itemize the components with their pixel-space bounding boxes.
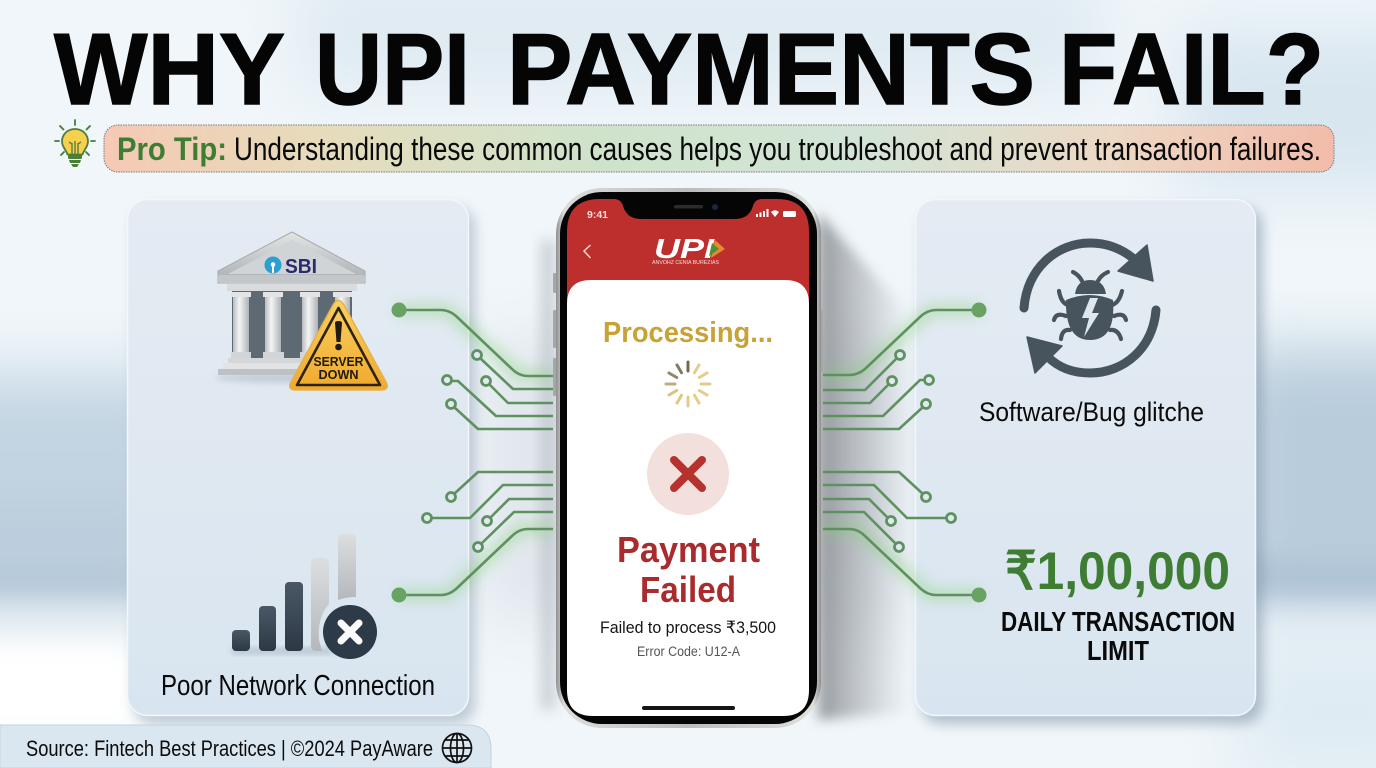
payment failed heading: Failed bbox=[640, 569, 736, 610]
sbi logo bbox=[264, 256, 317, 278]
limit caption bbox=[1001, 606, 1235, 666]
notch speaker and camera bbox=[674, 204, 718, 210]
warning triangle: SERVER bbox=[314, 354, 364, 369]
limit caption: LIMIT bbox=[1087, 635, 1149, 666]
title: UPI bbox=[315, 14, 470, 126]
icon: weak network signal bbox=[232, 534, 377, 659]
upi logo: UPI bbox=[654, 233, 716, 264]
circuit traces: left bbox=[392, 302, 553, 602]
panel: limits and glitches bbox=[916, 200, 1263, 724]
glow behind main traces bbox=[399, 310, 979, 595]
phone body bbox=[556, 188, 821, 728]
phone drop shadow bbox=[540, 212, 912, 720]
title: FAIL? bbox=[1059, 14, 1324, 126]
bank building bbox=[218, 232, 365, 375]
icon: light bulb bbox=[55, 120, 95, 167]
limit amount: ₹1,00,000 bbox=[1005, 542, 1230, 601]
warning triangle bbox=[290, 300, 387, 390]
pro tip banner bbox=[104, 125, 1334, 172]
payment failed heading: Payment bbox=[617, 529, 760, 570]
no signal badge bbox=[323, 605, 377, 659]
limit caption: DAILY TRANSACTION bbox=[1001, 606, 1235, 637]
home indicator bbox=[642, 706, 735, 710]
warning triangle: DOWN bbox=[318, 367, 358, 382]
footer source bar bbox=[0, 725, 491, 768]
back arrow bbox=[584, 245, 590, 258]
spinner bbox=[666, 362, 710, 406]
error code: Error Code: U12-A bbox=[637, 644, 740, 659]
status bar: 9:41 bbox=[587, 209, 608, 221]
source text: Source: Fintech Best Practices | ©2024 PayAware bbox=[26, 736, 433, 761]
icon: bug with refresh arrows bbox=[1024, 243, 1156, 373]
icon: bank with server down warning bbox=[215, 232, 387, 390]
failure badge bbox=[647, 433, 729, 515]
failed amount: Failed to process ₹3,500 bbox=[600, 618, 776, 637]
title bbox=[54, 14, 1324, 126]
bug bbox=[1054, 272, 1126, 340]
status bar bbox=[587, 209, 796, 221]
sbi logo: SBI bbox=[285, 256, 317, 278]
label: poor network: Poor Network Connection bbox=[161, 670, 435, 702]
circuit traces: right bbox=[823, 302, 986, 602]
phone side buttons bbox=[553, 273, 823, 396]
title: WHY bbox=[54, 14, 285, 126]
pro tip label: Pro Tip: bbox=[117, 131, 227, 167]
upi logo bbox=[652, 233, 725, 266]
processing label: Processing... bbox=[603, 317, 773, 349]
upi logo: ANVOHZ CENIA BUREZIAS bbox=[652, 260, 719, 266]
payment failed heading bbox=[617, 529, 760, 610]
panel: server down bbox=[128, 200, 475, 724]
phone bbox=[553, 188, 823, 728]
title: PAYMENTS bbox=[507, 14, 1035, 126]
icon: globe bbox=[442, 734, 472, 762]
label: software bug: Software/Bug glitche bbox=[979, 397, 1204, 427]
refresh arrows bbox=[1024, 243, 1156, 373]
phone screen bbox=[567, 199, 809, 716]
